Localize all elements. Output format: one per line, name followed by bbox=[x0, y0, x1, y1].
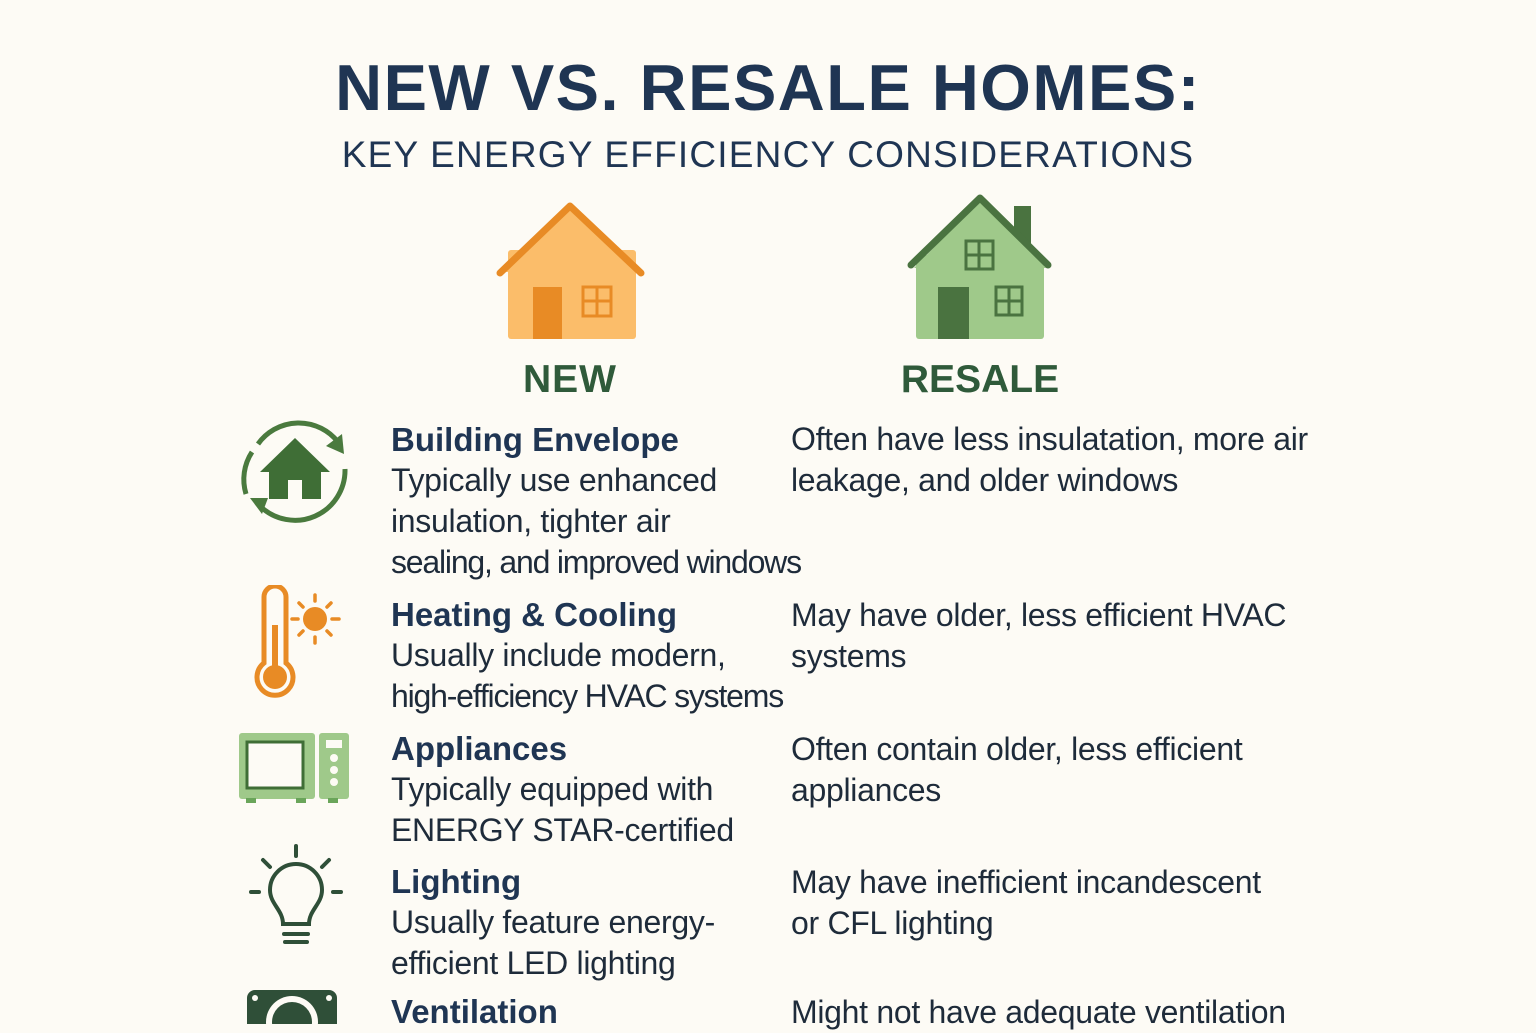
title: NEW VS. RESALE HOMES: bbox=[335, 51, 1201, 124]
column heading: new: NEW bbox=[523, 358, 617, 401]
row: lighting resale: May have inefficient incandescent bbox=[791, 864, 1261, 900]
row: lighting new bbox=[391, 863, 715, 981]
subtitle: KEY ENERGY EFFICIENCY CONSIDERATIONS bbox=[342, 134, 1194, 175]
row: heating resale: May have older, less efficient HVAC bbox=[791, 597, 1286, 633]
row: heating new: Heating & Cooling bbox=[391, 596, 677, 633]
icon: fan bbox=[247, 990, 337, 1024]
row: lighting new: efficient LED lighting bbox=[391, 945, 676, 981]
row: appliances resale: appliances bbox=[791, 772, 941, 808]
icon: microwave bbox=[239, 733, 349, 803]
icon: building envelope bbox=[241, 420, 348, 523]
row: lighting resale: or CFL lighting bbox=[791, 905, 993, 941]
row: heating resale: systems bbox=[791, 638, 906, 674]
row: appliances resale bbox=[791, 731, 1243, 808]
row: appliances new: Typically equipped with bbox=[391, 771, 713, 807]
row: building envelope new: sealing, and improved windows bbox=[391, 544, 801, 580]
row: lighting new: Lighting bbox=[391, 863, 521, 900]
icon: resale house bbox=[908, 194, 1052, 339]
icon: light bulb bbox=[249, 844, 343, 944]
row: heating resale bbox=[791, 597, 1286, 674]
row: building envelope new bbox=[391, 421, 801, 580]
row: lighting resale bbox=[791, 864, 1261, 941]
row: building envelope resale: Often have less insulatation, more air bbox=[791, 421, 1308, 457]
row: ventilation new: Ventilation bbox=[391, 993, 558, 1030]
row: appliances new bbox=[391, 730, 734, 848]
row: appliances resale: Often contain older, less efficient bbox=[791, 731, 1242, 767]
row: building envelope new: Building Envelope bbox=[391, 421, 679, 458]
row: appliances new: ENERGY STAR-certified bbox=[391, 812, 734, 848]
row: appliances new: Appliances bbox=[391, 730, 567, 767]
row: ventilation resale: Might not have adequate ventilation bbox=[791, 994, 1286, 1030]
row: heating new: high-efficiency HVAC systems bbox=[391, 678, 783, 714]
row: building envelope resale: leakage, and older windows bbox=[791, 462, 1178, 498]
row: lighting new: Usually feature energy- bbox=[391, 904, 715, 940]
row: heating new: Usually include modern, bbox=[391, 637, 726, 673]
row: building envelope new: Typically use enhanced bbox=[391, 462, 717, 498]
icon: thermometer bbox=[254, 585, 341, 698]
row: building envelope resale bbox=[791, 421, 1308, 498]
column heading: resale: RESALE bbox=[901, 358, 1059, 401]
icon: new house bbox=[496, 202, 644, 339]
row: building envelope new: insulation, tighter air bbox=[391, 503, 670, 539]
row: heating new bbox=[391, 596, 784, 714]
